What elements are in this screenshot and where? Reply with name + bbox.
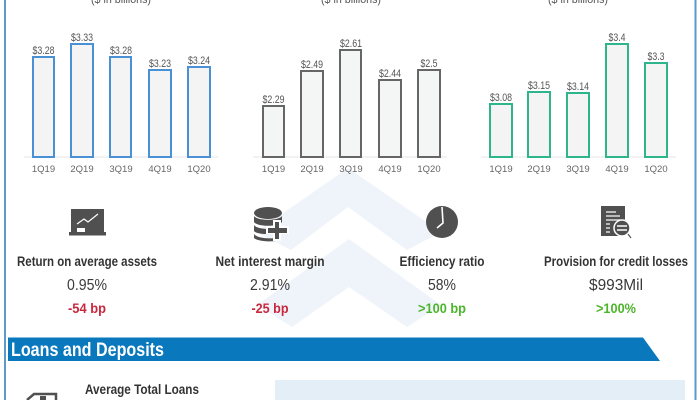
icon: document with magnifier xyxy=(601,206,631,238)
chart: blue bars: $3.28 xyxy=(110,45,132,57)
chart: green bars: $3.4 xyxy=(608,32,626,44)
chart: grey bars: 3Q19 xyxy=(339,164,363,175)
chart: grey bars: 1Q19 xyxy=(262,164,285,175)
chart: blue bars: $3.33 xyxy=(71,32,93,44)
metric: provision for credit losses: $993Mil xyxy=(589,277,643,294)
chart: grey bars: $2.49 xyxy=(301,59,323,71)
chart: grey bars: $2.44 xyxy=(379,68,401,80)
chart: blue bars: 4Q19 xyxy=(148,164,172,175)
chart: green bars xyxy=(481,0,676,175)
metric: efficiency ratio xyxy=(400,254,484,316)
metric: return on average assets: 0.95% xyxy=(67,277,107,294)
chart: green bars: 2Q19 xyxy=(527,164,551,175)
background chevron arrows xyxy=(256,168,441,327)
icon: database plus xyxy=(254,207,289,241)
chart: green bars: 4Q19 xyxy=(605,164,629,175)
metric: provision for credit losses: >100% xyxy=(596,300,636,316)
chart: blue bars: 1Q19 xyxy=(32,164,55,175)
chart: blue bars xyxy=(24,0,218,175)
metric: net interest margin: 2.91% xyxy=(250,277,290,294)
icon: clock xyxy=(426,206,458,238)
chart: green bars: 1Q19 xyxy=(489,164,513,175)
chart: blue bars: $3.24 xyxy=(188,55,210,67)
chart: green bars: $3.08 xyxy=(490,92,512,104)
icon: presentation board xyxy=(69,209,106,236)
icon: loans xyxy=(27,394,56,400)
right frame border xyxy=(694,0,696,400)
section header: loans and deposits xyxy=(8,338,660,361)
heading: average total loans: Average Total Loans xyxy=(85,382,199,397)
metric: return on average assets: Return on average assets xyxy=(17,254,157,269)
chart: green bars: 3Q19 xyxy=(566,164,590,175)
metric: return on average assets xyxy=(17,254,157,316)
chart: grey bars xyxy=(253,0,447,175)
left frame border xyxy=(4,0,6,400)
metric: net interest margin: -25 bp xyxy=(252,300,288,316)
chart: grey bars: 1Q20 xyxy=(417,164,441,175)
chart: grey bars: $2.29 xyxy=(262,94,284,106)
metric: efficiency ratio: Efficiency ratio xyxy=(400,254,484,269)
metric: net interest margin: Net interest margin xyxy=(216,254,324,269)
panel: light blue loans panel xyxy=(275,380,685,400)
chart: grey bars: $2.61 xyxy=(340,38,362,50)
metric: net interest margin xyxy=(216,254,324,316)
chart: grey bars: 2Q19 xyxy=(300,164,324,175)
chart: green bars: $3.14 xyxy=(567,81,589,93)
chart: blue bars: 2Q19 xyxy=(70,164,94,175)
chart: green bars: $3.15 xyxy=(528,80,550,92)
metric: efficiency ratio: >100 bp xyxy=(418,300,466,316)
chart: green bars: $3.3 xyxy=(648,51,664,63)
chart: blue bars: 1Q20 xyxy=(187,164,211,175)
chart: grey bars: $2.5 xyxy=(420,58,438,70)
metric: efficiency ratio: 58% xyxy=(428,277,456,294)
chart: green bars: 1Q20 xyxy=(644,164,668,175)
chart: blue bars: 3Q19 xyxy=(109,164,133,175)
chart: grey bars: 4Q19 xyxy=(378,164,402,175)
metric: return on average assets: -54 bp xyxy=(68,300,106,316)
section header: loans and deposits: Loans and Deposits xyxy=(11,340,164,361)
chart: blue bars: $3.23 xyxy=(149,58,171,70)
metric: provision for credit losses xyxy=(544,254,688,316)
chart: blue bars: $3.28 xyxy=(32,45,54,57)
